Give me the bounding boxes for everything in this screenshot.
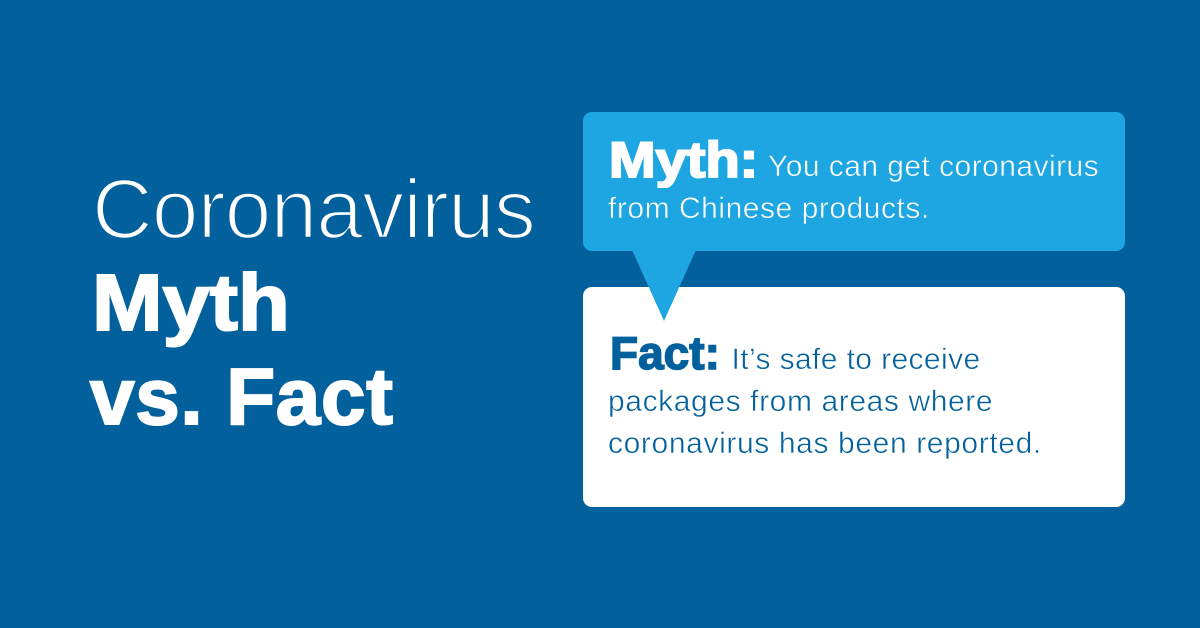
fact line 1: It’s safe to receive [732,343,981,376]
title line: Myth: Myth [92,258,290,347]
fact text [608,326,1042,460]
myth text [608,132,1099,225]
panel: fact box [583,287,1125,507]
myth label: Myth: [608,132,758,188]
fact label: Fact: [610,326,720,378]
fact line 2: packages from areas where [608,385,993,418]
panel: myth speech bubble [583,112,1125,251]
fact line 3: coronavirus has been reported. [608,427,1042,460]
title [88,162,535,441]
title line: Coronavirus: Coronavirus [92,162,535,256]
myth line 2: from Chinese products. [608,192,930,225]
title line: vs. Fact: vs. Fact [90,352,394,441]
myth line 1: You can get coronavirus [768,150,1099,183]
speech bubble pointer [632,251,696,321]
